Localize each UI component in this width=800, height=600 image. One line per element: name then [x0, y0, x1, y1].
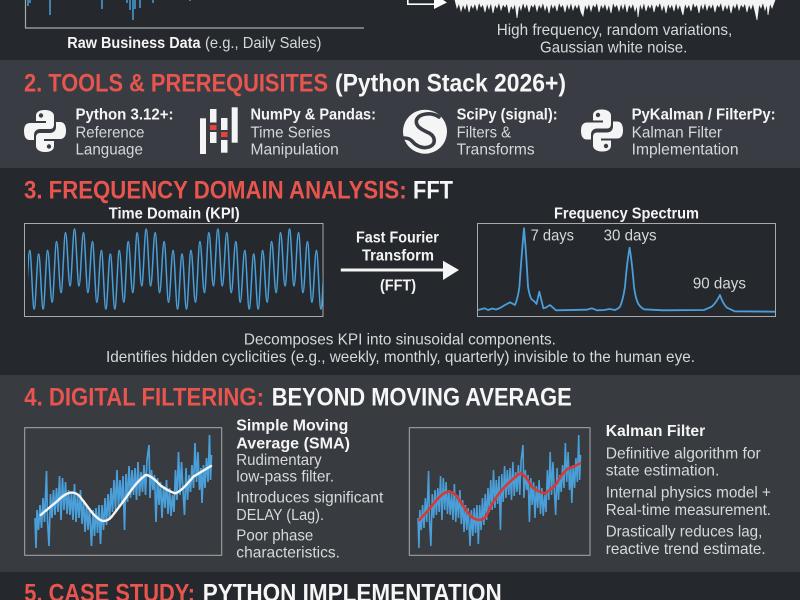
chart: frequency spectrum: 90 days	[693, 276, 746, 293]
label: time domain: Time Domain (KPI)	[109, 205, 240, 222]
tool: python text: Language	[76, 142, 143, 158]
tool: python text	[76, 106, 174, 158]
text: kalman description: reactive trend estimate.	[606, 541, 766, 558]
description: noise line 2: Gaussian white noise.	[540, 40, 687, 57]
description: noise line 1: High frequency, random variations,	[497, 22, 732, 39]
tool: numpy text	[250, 106, 376, 158]
text: kalman description	[606, 423, 771, 558]
tool: pykalman text: Implementation	[632, 142, 739, 158]
icon: numpy pandas	[200, 107, 238, 154]
arrow: fast fourier transform: Transform	[362, 248, 434, 265]
text: kalman description: state estimation.	[606, 463, 719, 480]
heading: tools: 2. TOOLS & PREREQUISITES	[24, 70, 328, 98]
text: kalman description: Kalman Filter	[606, 423, 705, 440]
heading: python stack: (Python Stack 2026+)	[335, 70, 566, 98]
tool: scipy text	[457, 106, 558, 158]
icon: python	[24, 110, 66, 152]
panel: frequency domain analysis	[3, 176, 775, 366]
panel: tools and prerequisites	[24, 70, 776, 158]
icon: scipy	[403, 110, 447, 154]
text: sma description: Introduces significant	[236, 490, 384, 507]
chart: frequency spectrum: 7 days	[531, 228, 574, 245]
heading: digital filtering: 4. DIGITAL FILTERING:	[24, 383, 264, 411]
arrow: fast fourier transform	[341, 230, 459, 295]
chart: frequency spectrum	[478, 224, 776, 316]
chart: simple moving average	[25, 428, 222, 555]
tool: numpy text: Time Series	[250, 124, 330, 141]
chart: kalman filter	[409, 428, 590, 555]
panel: case study heading	[24, 580, 502, 600]
chart: raw business data	[26, 0, 364, 28]
tool: pykalman text: PyKalman / FilterPy:	[632, 106, 776, 124]
tool: python text: Python 3.12+:	[76, 106, 174, 124]
tool: scipy text: Filters &	[457, 124, 511, 141]
label: frequency spectrum: Frequency Spectrum	[554, 205, 699, 222]
panel: digital filtering	[24, 383, 771, 561]
heading: fft: FFT	[413, 176, 453, 204]
text: sma description: DELAY (Lag).	[236, 507, 324, 524]
text: sma description: characteristics.	[236, 544, 340, 561]
tool: numpy text: NumPy & Pandas:	[250, 106, 376, 124]
arrow: fast fourier transform: (FFT)	[380, 278, 416, 295]
tool: pykalman text: Kalman Filter	[632, 124, 723, 141]
heading: frequency domain: 3. FREQUENCY DOMAIN ANALYSIS:	[24, 176, 407, 204]
heading: beyond moving average: BEYOND MOVING AVERAGE	[272, 383, 572, 411]
arrow: to noise	[407, 0, 447, 9]
tool: pykalman text	[632, 106, 776, 158]
text: kalman description: Drastically reduces lag,	[606, 524, 762, 541]
chart: time domain wave	[24, 223, 324, 317]
chart: white noise	[455, 0, 775, 20]
text: kalman description: Definitive algorithm for	[606, 445, 761, 462]
text: sma description: Poor phase	[236, 528, 313, 545]
chart: frequency spectrum: 30 days	[604, 228, 657, 245]
text: sma description	[236, 418, 384, 561]
arrow: fast fourier transform: Fast Fourier	[356, 230, 439, 247]
description: decomposes: Decomposes KPI into sinusoidal components.	[244, 332, 556, 349]
caption: raw business data: Raw Business Data	[67, 35, 201, 52]
text: kalman description: Real-time measurement.	[606, 502, 771, 519]
caption detail: daily sales: (e.g., Daily Sales)	[205, 35, 321, 52]
text: kalman description: Internal physics model +	[606, 485, 771, 502]
text: sma description: Simple Moving	[236, 418, 348, 435]
tool: python text: Reference	[76, 124, 145, 141]
description: hidden cyclicities: Identifies hidden cyclicities (e.g., weekly, monthly, quarterly) invisible to the human eye.	[106, 349, 695, 366]
text: sma description: Average (SMA)	[236, 435, 350, 452]
icon: pykalman python	[581, 110, 623, 152]
tool: scipy text: SciPy (signal):	[457, 106, 558, 124]
text: sma description: low-pass filter.	[236, 469, 334, 486]
tool: numpy text: Manipulation	[250, 142, 339, 158]
text: sma description: Rudimentary	[236, 452, 322, 469]
panel: raw data and noise (section 1 remainder)	[26, 0, 775, 57]
tool: scipy text: Transforms	[457, 142, 535, 158]
